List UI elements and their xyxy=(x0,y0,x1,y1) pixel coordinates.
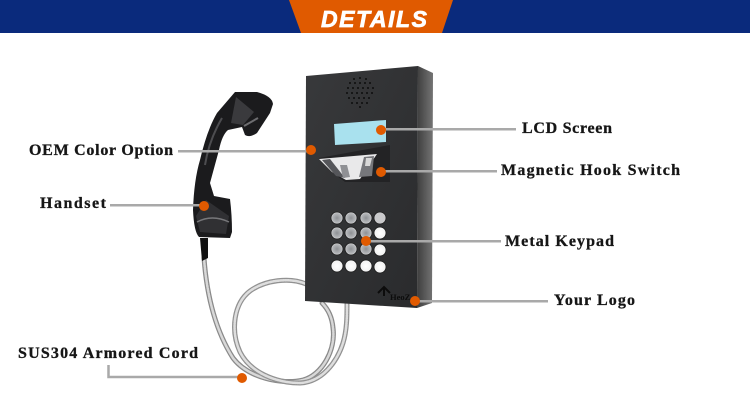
brand logo xyxy=(378,287,411,302)
heading tab xyxy=(289,0,453,33)
heading: DETAILS xyxy=(321,6,428,32)
callout: Metal Keypad xyxy=(361,233,614,250)
armored cord xyxy=(204,258,347,383)
callout: Handset: Handset xyxy=(40,195,107,212)
callout: Magnetic Hook Switch xyxy=(376,162,680,179)
callout: OEM Color Option xyxy=(29,142,316,159)
side panel xyxy=(417,66,433,308)
callout: LCD Screen xyxy=(376,120,612,137)
hook switch xyxy=(319,145,390,182)
callout: LCD Screen: LCD Screen xyxy=(522,120,612,137)
callout: OEM Color Option: OEM Color Option xyxy=(29,142,173,159)
header banner xyxy=(0,0,750,33)
callout: Magnetic Hook Switch: Magnetic Hook Switch xyxy=(501,162,680,179)
callout: Your Logo: Your Logo xyxy=(554,292,635,309)
brand logo: HeoZ xyxy=(390,292,411,302)
callout: Your Logo xyxy=(410,292,635,309)
LCD screen xyxy=(334,120,386,145)
callout: SUS304 Armored Cord xyxy=(18,345,247,383)
phone body xyxy=(305,66,433,308)
callout: Handset xyxy=(40,195,209,212)
callout: Metal Keypad: Metal Keypad xyxy=(505,233,614,250)
callout: SUS304 Armored Cord: SUS304 Armored Cord xyxy=(18,345,198,362)
handset xyxy=(193,92,273,261)
speaker grille xyxy=(346,77,374,108)
keypad xyxy=(331,212,386,273)
front panel xyxy=(305,66,418,308)
